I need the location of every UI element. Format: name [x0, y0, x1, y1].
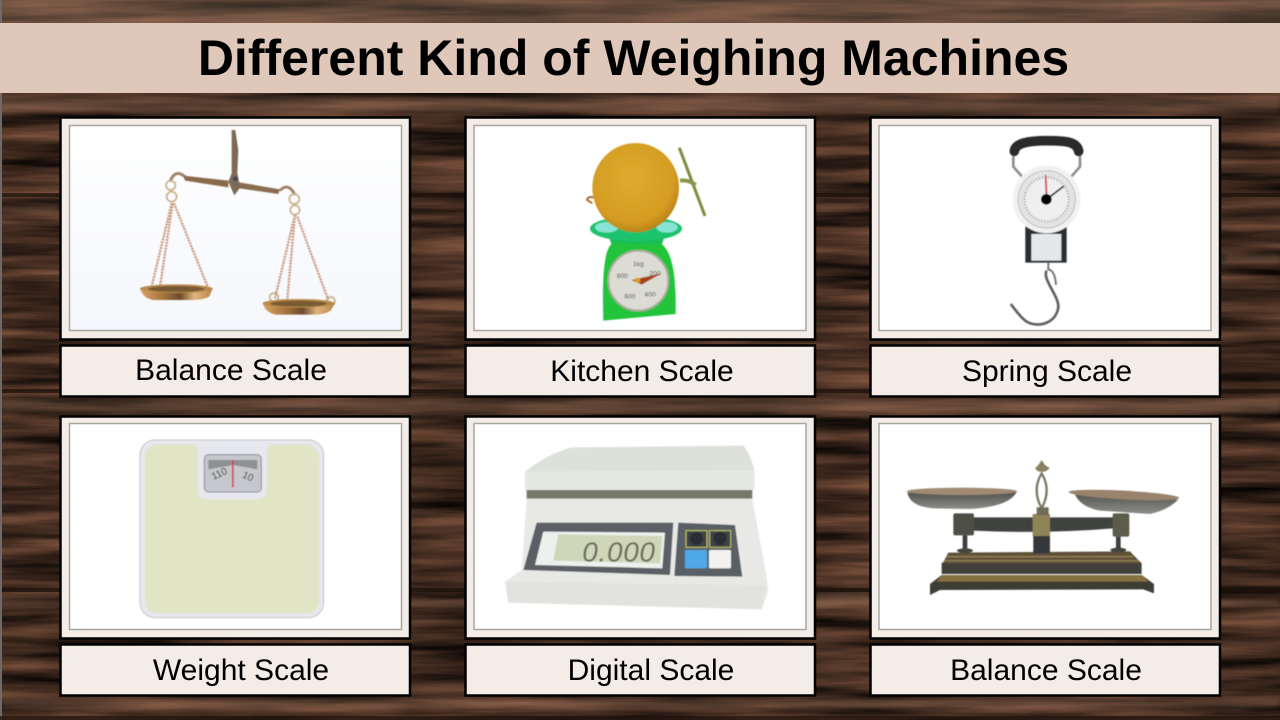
panel: digital scale photo: [466, 416, 815, 638]
icon: melon on green kitchen scale: 200: [649, 270, 661, 277]
title: Different Kind of Weighing Machines: [198, 30, 1069, 86]
icon: bathroom weight scale: [140, 440, 324, 618]
label: balance scale: [60, 346, 410, 396]
panel: weight scale photo: [60, 416, 410, 638]
icon: bathroom weight scale: 110: [210, 466, 230, 483]
icon: melon on green kitchen scale: 600: [624, 294, 636, 301]
label: digital scale: Digital Scale: [568, 654, 734, 687]
panel: balance scale photo: [60, 118, 410, 340]
icon: digital scale: [505, 446, 768, 609]
label: weight scale: [60, 644, 410, 696]
label: balance scale: Balance Scale: [135, 354, 327, 387]
icon: melon on green kitchen scale: 800: [617, 273, 628, 280]
icon: melon on green kitchen scale: 1kg: [633, 261, 644, 268]
title banner: [0, 23, 1280, 93]
label: antique balance scale: [870, 644, 1220, 696]
panel: spring scale photo: [870, 118, 1220, 340]
icon: hanging spring scale: [1011, 141, 1081, 325]
label: kitchen scale: Kitchen Scale: [550, 355, 734, 388]
panel: kitchen scale photo: [466, 118, 815, 340]
icon: melon on green kitchen scale: 400: [644, 292, 656, 299]
icon: antique balance scale: [907, 460, 1179, 595]
label: spring scale: Spring Scale: [962, 355, 1132, 388]
panel: antique balance scale photo: [870, 416, 1220, 638]
icon: bathroom weight scale: 10: [240, 470, 255, 485]
icon: digital scale: 0.000: [582, 537, 656, 568]
label: kitchen scale: [466, 346, 815, 396]
icon: hanging balance scale: [140, 130, 335, 315]
label: weight scale: Weight Scale: [153, 654, 329, 687]
label: antique balance scale: Balance Scale: [950, 654, 1142, 687]
label: spring scale: [870, 346, 1220, 396]
icon: melon on green kitchen scale: [587, 143, 705, 321]
label: digital scale: [466, 644, 815, 696]
